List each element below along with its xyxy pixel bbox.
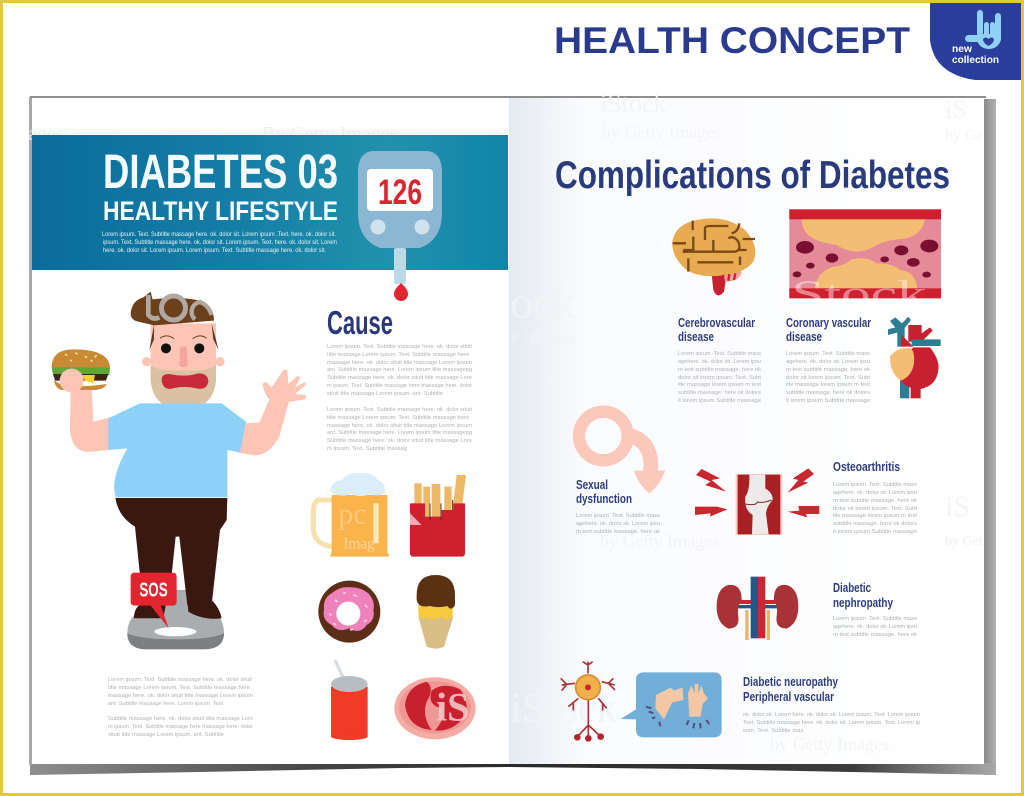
neuron (561, 662, 615, 742)
text: osteoarthritis: subtitle massage. here ok dolors (833, 521, 917, 527)
watermarks: iS (945, 95, 967, 124)
heading: sexual dysfunction: dysfunction (576, 492, 632, 506)
text: diabetic nephropathy: Lorem ipsum .Text. Subtitle mass (833, 616, 917, 622)
text: osteoarthritis: dolor sit lorem ipsum. Text. Subt (833, 506, 917, 512)
arms (70, 388, 110, 452)
header title: HEALTH CONCEPT (554, 20, 910, 61)
heading: cerebrovascular disease: Cerebrovascular (678, 316, 755, 330)
SOS sign (131, 573, 177, 628)
text: cause paragraphs: Subtitle massage here. ok. dolor situit title massage Lore (327, 438, 472, 444)
text: osteoarthritis: Lorem ipsum .Text. Subtitle mass (833, 482, 917, 488)
ice cream (417, 575, 455, 649)
text: sexual dysfunction (576, 513, 660, 535)
text: cause paragraphs: massage here. ok. dolor situit title massage Lorem ipsum (327, 360, 472, 366)
watermarks: ages (28, 123, 64, 145)
badge: new collection (930, 3, 1021, 80)
watermarks: ock (510, 277, 576, 328)
beer mug (313, 473, 389, 557)
watermarks: By Getty Images (262, 123, 398, 145)
pain bolts (695, 468, 819, 517)
male symbol (579, 412, 665, 493)
heading: cerebrovascular disease: disease (678, 330, 714, 344)
text: diabetic neuropathy (743, 712, 920, 734)
text: diabetic neuropathy: Text. Subtitle massage here. ok. dolor sit. Lorem ipsum. Text. Lorem ip (743, 720, 920, 726)
text: cause paragraphs: m ipsum. Text. Subtitle massage here massage here. dolor (327, 383, 472, 389)
speech bubble (621, 672, 722, 737)
icon: glucose meter (358, 151, 442, 301)
text: cerebrovascular (678, 351, 761, 404)
text: cause paragraphs: Lorem ipsum. Text. Subtitle massage here. ok. dolor situit (327, 344, 472, 350)
heading: Cause: Cause (327, 304, 393, 341)
banner subheading: HEALTHY LIFESTYLE (103, 196, 338, 226)
beer mug: Imag (343, 535, 375, 552)
badge: new collection: collection (952, 54, 999, 66)
text: cause paragraphs: Subtitle massage here. ok. dolor situit title massage Lore (327, 375, 472, 381)
text: sexual dysfunction: Lorem ipsum .Text. Subtitle mass (576, 513, 660, 519)
heading: coronary vascular disease: Coronary vascular (786, 316, 871, 330)
text: lower left paragraphs: title massage Lorem ipsum. Text. Subtitle massage here (108, 685, 250, 691)
watermarks: y Images (510, 326, 575, 346)
heading: diabetic neuropathy: Diabetic neuropathy (743, 675, 838, 689)
heading: diabetic nephropathy: nephropathy (833, 596, 893, 610)
text: cause paragraphs: massage here. ok. dolor situit title massage Lorem ipsum (327, 423, 472, 429)
text: diabetic nephropathy: agehere. ok. dolor sit. Lorem ipsu (833, 624, 917, 630)
banner text: here. ok. dolor sit. Lorem ipsum. Lorem ipsum. Text. Subtitle massage here. ok. dolor sit. (103, 247, 326, 254)
knee (736, 474, 782, 535)
heading: diabetic nephropathy: Diabetic (833, 581, 871, 595)
text: coronary: itle massage lorem ipsum m text (786, 382, 870, 388)
watermarks: by Getty Images (600, 531, 719, 551)
meat (394, 677, 476, 739)
text: lower left paragraphs: ant. Subtitle massage here. Lorem ipsum. Text (108, 701, 223, 707)
brain (672, 218, 755, 295)
text: coronary: subtitle massage. here ok dolors (786, 390, 870, 396)
watermarks: iS (945, 490, 970, 523)
beer mug: pc (338, 497, 367, 530)
text: diabetic neuropathy: sum. Text. Subtitle mas. (743, 728, 805, 734)
donut (318, 581, 380, 643)
soda can (331, 660, 368, 740)
text: cause paragraphs: m ipsum. Text. Subtitle massag (327, 446, 407, 452)
text: cerebrovascular: itle massage lorem ipsum m text (678, 382, 761, 388)
icons: male symbol, knee, kidneys (579, 412, 819, 640)
text: coronary: dolor sit lorem ipsum. Text. Subt (786, 375, 870, 381)
heading: sexual dysfunction: Sexual (576, 478, 608, 492)
burger (52, 349, 110, 368)
shirt (108, 403, 246, 497)
watermarks: by Get (945, 534, 983, 549)
text: cause paragraphs: Lorem ipsum. Text. Subtitle massage here. ok. dolor situit (327, 407, 472, 413)
text: osteoarthritis: itle massage lorem ipsum m text (833, 513, 917, 519)
banner text: Lorem ipsum. Text. Subtitle massage here. ok. dolor sit. Lorem ipsum .Text. here. ok. dolor sit. (102, 231, 336, 238)
text: coronary (786, 351, 870, 404)
text: coronary: it lorem ipsum Subtitle massage (786, 398, 870, 404)
text: lower left paragraphs: situit title massage Lorem ipsum. ant. Subtitle (108, 732, 224, 738)
hands (655, 687, 683, 719)
badge: new collection: new (952, 43, 973, 55)
meat: iS (436, 685, 469, 730)
heading: cerebrovascular disease (678, 316, 755, 344)
banner heading: DIABETES 03 (103, 146, 338, 199)
artery (775, 209, 941, 316)
text: diabetic nephropathy: m text subtitle massage. here ok (833, 632, 917, 638)
illustration: overweight man on scale: SOS (139, 580, 168, 602)
text: sexual dysfunction: agehere. ok. dolor sit. Lorem ipsu (576, 521, 660, 527)
illustration: overweight man on scale (52, 292, 306, 649)
text: cerebrovascular: it lorem ipsum Subtitle massage (678, 398, 761, 404)
text: coronary: m text subtitle massage. here ok (786, 367, 870, 373)
hair (131, 292, 214, 325)
text: osteoarthritis: agehere. ok. dolor sit. Lorem ipsu (833, 490, 917, 496)
banner text (102, 231, 337, 254)
text: cause paragraphs: ant. Subtitle massage here. Lorem ipsum title massagepg (327, 430, 472, 436)
heading: coronary vascular disease: disease (786, 330, 822, 344)
watermarks: iStock (600, 89, 666, 118)
fries (410, 475, 466, 557)
heading: diabetic neuropathy (743, 675, 838, 704)
artery: iStock (775, 274, 928, 316)
text: diabetic neuropathy: ok. dolor sit. Lorem here. ok. dolor sit. Lorem ipsum. Text. Lorem ipsum (743, 712, 920, 718)
neck and face (142, 357, 151, 366)
text: cerebrovascular: agehere. ok. dolor sit. Lorem ipsu (678, 359, 761, 365)
text: osteoarthritis: it lorem ipsum Subtitle massage (833, 529, 917, 535)
text: osteoarthritis: m text subtitle massage. here ok (833, 498, 917, 504)
watermarks: by Ge (945, 127, 984, 144)
kidneys (717, 577, 798, 640)
text: cerebrovascular: Lorem ipsum .Text. Subtitle mass (678, 351, 761, 357)
text: cerebrovascular: m text subtitle massage. here ok (678, 367, 761, 373)
text: diabetic nephropathy (833, 616, 917, 638)
text: lower left paragraphs (108, 677, 253, 738)
text: cerebrovascular: dolor sit lorem ipsum. Text. Subt (678, 375, 761, 381)
text: cerebrovascular: subtitle massage. here ok dolors (678, 390, 761, 396)
text: cause paragraphs: situit title massage Lorem ipsum. ant. Subtitle (327, 391, 443, 397)
watermarks (28, 89, 984, 754)
heading: osteoarthritis: Osteoarthritis (833, 460, 900, 474)
text: lower left paragraphs: m ipsum. Text. Subtitle massage here massage here. dolor (108, 724, 253, 730)
watermarks: by Getty Images (602, 122, 721, 142)
icons: brain, artery, heart (672, 209, 941, 398)
heading: coronary vascular disease (786, 316, 871, 344)
watermarks: iStock (510, 686, 617, 732)
text: cause paragraphs: title massage Lorem ipsum. Text. Subtitle massage here (327, 352, 469, 358)
scale (127, 590, 224, 649)
icons: unhealthy foods (313, 473, 476, 740)
banner text: ipsum. Text. Subtitle massage here. ok. dolor sit. Lorem ipsum. Text. here. ok. dolor sit. Lorem (103, 239, 337, 246)
text: sexual dysfunction: m text subtitle massage. here ok (576, 529, 660, 535)
text: cause paragraphs: ant. Subtitle massage here. Lorem ipsum title massagepg (327, 367, 472, 373)
watermarks: by Getty Images (770, 734, 889, 754)
banner (32, 135, 508, 270)
text: osteoarthritis (833, 482, 917, 535)
text: coronary: agehere. ok. dolor sit. Lorem ipsu (786, 359, 870, 365)
heading: sexual dysfunction (576, 478, 632, 506)
text: lower left paragraphs: Subtitle massage here. ok. dolor situit title massage Lore (108, 716, 253, 722)
text: coronary: Lorem ipsum .Text. Subtitle mass (786, 351, 870, 357)
text: lower left paragraphs: massage here. ok. dolor situit title massage Lorem ipsum (108, 693, 253, 699)
heading: diabetic nephropathy (833, 581, 893, 610)
text: cause paragraphs (327, 344, 472, 452)
heading: diabetic neuropathy: Peripheral vascular (743, 690, 834, 704)
text: cause paragraphs: title massage Lorem ipsum. Text. Subtitle massage here (327, 415, 469, 421)
heart (888, 317, 941, 398)
icon: glucose meter: 126 (378, 173, 422, 212)
icons: neuron and hands (561, 662, 722, 742)
text: lower left paragraphs: Lorem ipsum. Text. Subtitle massage here. ok. dolor situit (108, 677, 252, 683)
trousers (115, 498, 227, 605)
